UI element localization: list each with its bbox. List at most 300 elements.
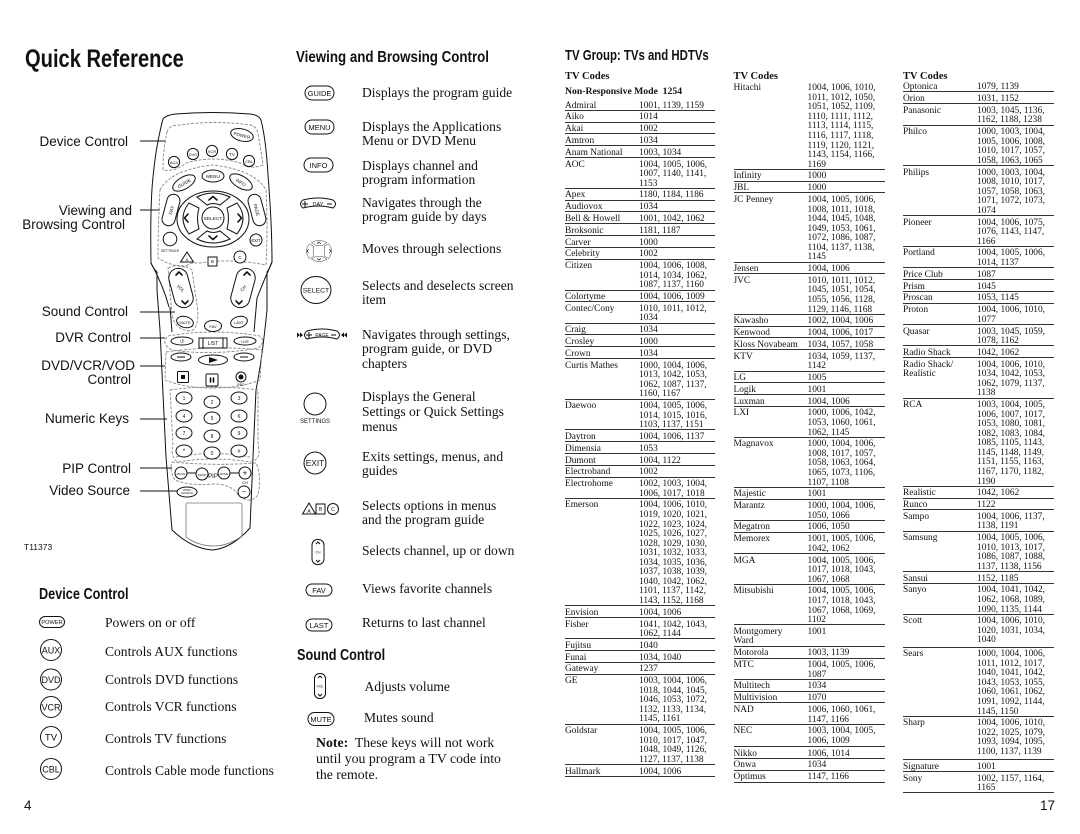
- numeric keys: *: [183, 449, 186, 455]
- page number 17: 17: [1040, 798, 1055, 813]
- volume, channel and DVR keys: LIVE: [241, 340, 249, 344]
- label: DVR Control: DVR Control: [55, 330, 131, 345]
- icon: MENU key: MENU: [308, 123, 331, 132]
- numeric keys: 3: [238, 396, 241, 402]
- icon: DVD key: DVD: [41, 675, 61, 685]
- table: TV codes column 1: Celebrity: [565, 249, 600, 259]
- table: TV codes column 1: Akai: [565, 124, 583, 134]
- table: TV codes column 3: Sanyo: [903, 585, 926, 595]
- table: TV codes column 1: 1006, 1017, 1018: [639, 489, 705, 499]
- numeric keys: [176, 392, 247, 459]
- device keys: [168, 126, 255, 168]
- table: TV codes column 1: 1014, 1015, 1016,: [639, 411, 707, 421]
- device keys: VCR: [208, 149, 216, 154]
- table: TV codes column 1: Crown: [565, 349, 591, 359]
- icon: LAST key: [306, 619, 332, 631]
- table: TV codes column 3: 1042, 1062: [977, 488, 1019, 498]
- text: device control descriptions: [105, 615, 274, 778]
- table: TV codes column 1: GE: [565, 676, 578, 686]
- text: viewing and browsing descriptions: item: [362, 292, 386, 307]
- icon: FAV key: FAV: [312, 586, 326, 595]
- note: Note: These keys will not work: [316, 735, 494, 750]
- icon: MUTE key: MUTE: [310, 715, 332, 724]
- table: TV codes column 2: 1004, 1006, 1010,: [808, 83, 875, 93]
- icon: VCR key: VCR: [41, 702, 61, 712]
- heading: Device Control: Device Control: [39, 586, 129, 603]
- table: TV codes column 1: Electrohome: [565, 479, 613, 489]
- volume, channel and DVR keys: MUTE: [179, 320, 191, 325]
- table: TV codes column 1: Apex: [565, 190, 585, 200]
- text: viewing and browsing descriptions: guides: [362, 463, 397, 478]
- table: TV codes column 3: 1138: [977, 388, 995, 398]
- table: TV codes column 1: 1010, 1017, 1047,: [639, 736, 707, 746]
- text: device control descriptions: Controls Cable mode functions: [105, 763, 274, 778]
- table: TV codes column 3: 1011, 1012, 1017,: [977, 659, 1045, 669]
- table: TV codes column 1: Emerson: [565, 500, 598, 510]
- navigation keys: INFO: [235, 178, 247, 188]
- table: TV codes column 1: 1014: [639, 112, 658, 122]
- table: TV codes column 1: Admiral: [565, 101, 596, 111]
- table: TV codes column 1: 1004, 1005, 1006,: [639, 401, 707, 411]
- table: TV codes column 1: Dumont: [565, 456, 596, 466]
- label: DVD/VCR/VOD Control: Control: [87, 372, 131, 387]
- table: TV codes column 1: 1028, 1029, 1030,: [639, 539, 707, 549]
- icon: PAGE key: PAGE: [315, 333, 329, 339]
- table: TV codes column 1: 1014, 1034, 1062,: [639, 271, 707, 281]
- text: viewing and browsing descriptions: Returns to last channel: [362, 615, 486, 630]
- table: TV codes column 2: 1000, 1006, 1042,: [808, 408, 875, 418]
- table: TV codes column 1: 1003, 1034: [639, 148, 681, 158]
- text: device control descriptions: Controls TV functions: [105, 731, 226, 746]
- table: TV codes column 2: 1102: [808, 615, 826, 625]
- text: viewing and browsing descriptions: Settings or Quick Settings: [362, 404, 504, 419]
- table: TV codes column 1: 1103, 1137, 1151: [639, 420, 704, 430]
- table: TV codes column 3: 1003, 1004, 1005,: [977, 400, 1045, 410]
- table: TV codes column 3: 1008, 1010, 1017,: [977, 177, 1045, 187]
- table: TV codes column 3: 1079, 1139: [977, 82, 1019, 92]
- navigation keys: MENU: [206, 174, 220, 179]
- volume, channel and DVR keys: CH: [239, 284, 247, 292]
- label: Viewing and Browsing Control: [22, 203, 132, 232]
- table: TV codes column 2: 1062, 1145: [808, 428, 849, 438]
- table: TV codes column 3: Philco: [903, 127, 927, 137]
- note: the remote.: [316, 767, 378, 782]
- table: TV codes column 3: 1165: [977, 783, 995, 793]
- table: TV codes column 3: 1004, 1006, 1075,: [977, 218, 1045, 228]
- table: TV codes column 3: 1022, 1025, 1079,: [977, 728, 1045, 738]
- table: TV codes column 1: 1001, 1042, 1062: [639, 214, 705, 224]
- table: TV codes column 3: 1122: [977, 500, 995, 510]
- table: TV codes column 1: 1002: [639, 467, 658, 477]
- table: TV codes column 3: 1001: [977, 762, 996, 772]
- table: TV codes column 2: Kenwood: [734, 328, 770, 338]
- label: Video Source: Video Source: [49, 483, 130, 498]
- table: TV codes column 1: Envision: [565, 608, 598, 618]
- table: TV codes column 3: 1003, 1045, 1059,: [977, 327, 1045, 337]
- table: TV codes column 2: [734, 83, 885, 783]
- table: TV codes column 2: JVC: [734, 276, 750, 286]
- table: TV codes column 1: 1180, 1184, 1186: [639, 190, 704, 200]
- volume, channel and DVR keys: [167, 266, 257, 387]
- table: TV codes column 2: 1004, 1005, 1006,: [808, 660, 875, 670]
- icon: SETTINGS key: [300, 393, 330, 425]
- table: TV codes column 1: AOC: [565, 160, 585, 170]
- table: TV codes column 2: 1067, 1068: [808, 575, 850, 585]
- text: viewing and browsing descriptions: Selects and deselects screen: [362, 278, 514, 293]
- table: TV codes column 2: Mitsubishi: [734, 586, 774, 596]
- table: TV codes column 3: 1045: [977, 282, 996, 292]
- table: TV codes column 1: 1046, 1053, 1072,: [639, 695, 707, 705]
- numeric keys: 6: [238, 414, 241, 420]
- icon: volume key: VOL: [316, 684, 324, 688]
- numeric keys: 7: [183, 431, 186, 437]
- table: TV codes column 1: 1034: [639, 202, 658, 212]
- table: TV codes column 1: Amtron: [565, 136, 594, 146]
- table: TV codes column 2: 1004, 1005, 1006,: [808, 195, 875, 205]
- table: TV codes column 2: 1000, 1004, 1006,: [808, 439, 875, 449]
- table: TV codes column 2: 1169: [808, 160, 826, 170]
- table: TV codes column 2: 1004, 1005, 1006,: [808, 556, 875, 566]
- table: TV codes column 1: 1004, 1006: [639, 608, 681, 618]
- icon: A B C keys: A: [307, 509, 311, 515]
- table: TV codes column 1: 1034: [639, 313, 658, 323]
- table: TV codes column 3: 1071, 1072, 1073,: [977, 196, 1045, 206]
- table: TV codes column 3: Orion: [903, 94, 925, 104]
- volume, channel and DVR keys: FAV: [209, 324, 217, 329]
- table: TV codes column 1: Electroband: [565, 467, 610, 477]
- table: TV codes column 2: 1042, 1062: [808, 544, 850, 554]
- table: TV codes column 1: Crosley: [565, 337, 594, 347]
- table: TV codes column 2: Ward: [734, 636, 754, 646]
- table: TV codes column 1: 1004, 1006, 1009: [639, 292, 705, 302]
- text: viewing and browsing descriptions: program guide, or DVD: [362, 341, 492, 356]
- PIP keys and video source: MOVE: [220, 472, 228, 476]
- text: viewing and browsing descriptions: and the program guide: [362, 512, 484, 527]
- table: TV codes column 2: 1119, 1120, 1121,: [808, 141, 874, 151]
- table: TV codes column 3: 1091, 1092, 1144,: [977, 697, 1045, 707]
- table: TV codes column 3: 1004, 1005, 1006,: [977, 533, 1045, 543]
- table: TV codes column 3: 1074: [977, 206, 996, 216]
- table: TV codes column 1: 1034: [639, 325, 658, 335]
- note: until you program a TV code into: [316, 751, 501, 766]
- PIP keys and video source: MOVE: [177, 472, 185, 476]
- volume, channel and DVR keys: ↺: [180, 339, 184, 345]
- table: TV codes column 2: 1034, 1057, 1058: [808, 340, 873, 350]
- numeric keys: 0: [211, 451, 214, 457]
- table: TV codes column 1: Dimensia: [565, 444, 601, 454]
- table: TV codes column 2: 1000, 1004, 1006,: [808, 501, 875, 511]
- table: TV codes column 1: 1003, 1004, 1006,: [639, 676, 707, 686]
- table: TV codes column 3: 1005, 1006, 1008,: [977, 137, 1045, 147]
- table: TV codes column 3: 1093, 1094, 1095,: [977, 737, 1045, 747]
- table: TV codes column 2: 1034: [808, 681, 826, 691]
- table: TV codes column 1: 1007, 1140, 1141,: [639, 169, 706, 179]
- numeric keys: 5: [211, 416, 214, 422]
- text: adjusts volume: Adjusts volume: [364, 679, 450, 694]
- label: DVD/VCR/VOD Control: DVD/VCR/VOD: [41, 358, 135, 373]
- table: TV codes column 1: 1087, 1137, 1160: [639, 280, 704, 290]
- table: TV codes column 3: 1078, 1162: [977, 336, 1019, 346]
- table: TV codes column 3: 1062, 1068, 1089,: [977, 595, 1045, 605]
- table: TV codes column 2: Montgomery: [734, 627, 782, 637]
- table: TV codes column 2: 1005: [808, 373, 826, 383]
- table: TV codes column 3: Optonica: [903, 82, 937, 92]
- figure code: T11373: [24, 542, 52, 552]
- text: viewing and browsing descriptions: Exits settings, menus, and: [362, 449, 503, 464]
- table: TV codes column 2: 1107, 1108: [808, 478, 849, 488]
- table: TV codes column 3: 1152, 1185: [977, 574, 1018, 584]
- table: TV codes column 2: Optimus: [734, 772, 766, 782]
- table: TV codes column 2: 1145: [808, 252, 826, 262]
- text: device control descriptions: Powers on or off: [105, 615, 195, 630]
- table: TV codes column 3: Sansui: [903, 574, 928, 584]
- non-responsive mode line: Non-Responsive Mode 1254: [565, 86, 682, 97]
- numeric keys: 4: [183, 414, 186, 420]
- table: TV codes column 1: Curtis Mathes: [565, 361, 618, 371]
- table: TV codes column 2: Kloss Novabeam: [734, 340, 798, 350]
- table: TV codes column 3: 1085, 1105, 1143,: [977, 438, 1044, 448]
- text: viewing and browsing descriptions: program information: [362, 172, 475, 187]
- table: TV codes column 1: 1002: [639, 249, 658, 259]
- label: Sound Control: Sound Control: [42, 304, 128, 319]
- table: TV codes column 3: Radio Shack: [903, 348, 951, 358]
- table: TV codes column 3: 1043, 1053, 1055,: [977, 678, 1045, 688]
- table: TV codes column 1: 1004, 1006, 1137: [639, 432, 704, 442]
- table: TV codes column 2: 1004, 1006, 1017: [808, 328, 873, 338]
- table: TV codes column 2: 1011, 1012, 1050,: [808, 93, 875, 103]
- table: TV codes column 1: Gateway: [565, 664, 598, 674]
- table: TV codes column 1: 1004, 1006: [639, 767, 681, 777]
- table: TV codes column 2: 1001: [808, 627, 826, 637]
- table: TV codes column 3: Realistic: [903, 369, 936, 379]
- table: TV codes column 2: 1003, 1004, 1005,: [808, 726, 875, 736]
- table: TV codes column 2: KTV: [734, 352, 753, 362]
- table: TV codes column 2: 1113, 1114, 1115,: [808, 121, 873, 131]
- table: TV codes column 1: 1037, 1038, 1039,: [639, 567, 707, 577]
- PIP keys and video source: SWAP: [198, 473, 206, 477]
- table: TV codes column 1: 1145, 1161: [639, 714, 680, 724]
- icon: TV key: TV: [45, 732, 58, 744]
- table: TV codes column 2: 1000: [808, 183, 826, 193]
- volume, channel and DVR keys: LIST: [208, 341, 218, 347]
- table: TV codes column 1: 1040: [639, 641, 658, 651]
- table: TV codes column 2: 1010, 1011, 1012,: [808, 276, 875, 286]
- table: TV codes column 2: 1087: [808, 670, 826, 680]
- table: TV codes column 2: 1072, 1086, 1087,: [808, 233, 875, 243]
- text: viewing and browsing descriptions: Views favorite channels: [362, 581, 492, 596]
- table: TV codes column 2: Onwa: [734, 760, 756, 770]
- table: TV codes column 1: Aiko: [565, 112, 584, 122]
- table: TV codes column 1: Daytron: [565, 432, 596, 442]
- navigation keys: SELECT: [204, 216, 222, 222]
- table: TV codes column 1: 1040, 1042, 1062,: [639, 577, 707, 587]
- table: TV codes column 3: 1004, 1041, 1042,: [977, 585, 1045, 595]
- table: TV codes column 2: 1070: [808, 693, 826, 703]
- table: TV codes column 1: Bell & Howell: [565, 214, 620, 224]
- table: TV codes column 2: NEC: [734, 726, 752, 736]
- text: viewing and browsing descriptions: program guide by days: [362, 209, 487, 224]
- table: TV codes column 3: Runco: [903, 500, 927, 510]
- table: TV codes column 3: 1167, 1170, 1182,: [977, 467, 1044, 477]
- heading: TV Codes column 1: TV Codes: [565, 71, 609, 82]
- table: TV codes column 2: 1000: [808, 171, 826, 181]
- table: TV codes column 3: 1000, 1003, 1004,: [977, 127, 1045, 137]
- table: TV codes column 3: 1010, 1017, 1057,: [977, 146, 1045, 156]
- icon: channel key: CH: [315, 550, 321, 554]
- table: TV codes column 1: 1004, 1005, 1006,: [639, 160, 707, 170]
- icon: FAV key: [306, 584, 332, 596]
- text: device control descriptions: Controls DVD functions: [105, 672, 238, 687]
- table: TV codes column 1: Funai: [565, 653, 586, 663]
- table: TV codes column 2: 1008, 1011, 1018,: [808, 205, 875, 215]
- table: TV codes column 1: 1062, 1087, 1137,: [639, 380, 707, 390]
- text: mutes sound: Mutes sound: [364, 710, 434, 725]
- table: TV codes column 2: 1051, 1052, 1109,: [808, 102, 875, 112]
- icon: GUIDE key: GUIDE: [308, 89, 331, 98]
- PIP keys and video source: PIP: [208, 474, 218, 480]
- table: TV codes column 2: 1001: [808, 385, 826, 395]
- table: TV codes column 1: Craig: [565, 325, 586, 335]
- table: TV codes column 1: 1034: [639, 349, 658, 359]
- table: TV codes column 3: 1040: [977, 635, 996, 645]
- navigation keys: SETTINGS: [161, 249, 180, 253]
- table: TV codes column 1: 1127, 1137, 1138: [639, 755, 704, 765]
- table: TV codes column 1: 1101, 1137, 1142,: [639, 586, 706, 596]
- text: viewing and browsing descriptions: Selects options in menus: [362, 498, 496, 513]
- table: TV codes column 3: 1145, 1148, 1149,: [977, 448, 1044, 458]
- table: TV codes column 3: 1020, 1031, 1034,: [977, 626, 1045, 636]
- table: TV codes column 3: 1138, 1191: [977, 521, 1018, 531]
- table: TV codes column 1: 1002, 1003, 1004,: [639, 479, 707, 489]
- icon: INFO key: [304, 158, 333, 172]
- table: TV codes column 3: 1000, 1003, 1004,: [977, 168, 1045, 178]
- navigation keys: PAGE: [252, 203, 261, 217]
- table: TV codes column 3: 1190: [977, 477, 995, 487]
- table: TV codes column 2: Multivision: [734, 693, 777, 703]
- heading: Viewing and Browsing Control: Viewing and Browsing Control: [296, 49, 489, 66]
- volume, channel and DVR keys: LAST: [234, 320, 245, 325]
- icon: TV key: [40, 726, 62, 748]
- text: viewing and browsing descriptions: Displays the Applications: [362, 119, 501, 134]
- table: TV codes column 2: Luxman: [734, 397, 765, 407]
- table: TV codes column 1: Citizen: [565, 261, 592, 271]
- page number 4: 4: [24, 798, 32, 813]
- icon: AUX key: AUX: [42, 646, 60, 656]
- icon: MENU key: [305, 120, 334, 134]
- label: Viewing and Browsing Control: Browsing Control: [22, 217, 125, 232]
- table: TV codes column 3: RCA: [903, 400, 922, 410]
- table: TV codes column 3: Signature: [903, 762, 939, 772]
- table: TV codes column 3: 1137, 1138, 1156: [977, 562, 1042, 572]
- PIP keys and video source: +: [243, 468, 248, 478]
- volume, channel and DVR keys: REC: [237, 383, 245, 387]
- table: TV codes column 2: 1143, 1154, 1166,: [808, 150, 874, 160]
- table: TV codes column 3: 1087: [977, 270, 996, 280]
- icon: SETTINGS key: SETTINGS: [300, 419, 330, 425]
- table: TV codes column 2: Multitech: [734, 681, 770, 691]
- navigation keys: B: [211, 259, 214, 264]
- icon: A B C keys: C: [331, 507, 335, 513]
- table: TV codes column 3: Price Club: [903, 270, 943, 280]
- heading: TV Codes column 2: TV Codes: [734, 71, 778, 82]
- table: TV codes column 3: 1000, 1004, 1006,: [977, 649, 1045, 659]
- table: TV codes column 3: 1002, 1157, 1164,: [977, 774, 1044, 784]
- numeric keys: 1: [183, 396, 186, 402]
- table: TV codes column 3: Sampo: [903, 512, 929, 522]
- table: TV codes column 3: [903, 82, 1054, 793]
- table: TV codes column 1: Daewoo: [565, 401, 596, 411]
- table: TV codes column 2: 1067, 1068, 1069,: [808, 606, 875, 616]
- table: TV codes column 2: 1001: [808, 489, 826, 499]
- table: TV codes column 1: 1004, 1005, 1006,: [639, 726, 707, 736]
- table: TV codes column 3: 1004, 1006, 1010,: [977, 718, 1045, 728]
- icon: SELECT key: SELECT: [303, 288, 329, 294]
- table: TV codes column 1: Goldstar: [565, 726, 597, 736]
- numeric keys: 2: [211, 400, 214, 406]
- table: TV codes column 2: 1045, 1051, 1054,: [808, 285, 875, 295]
- table: TV codes column 1: 1000: [639, 238, 658, 248]
- table: TV codes column 1: 1053: [639, 444, 658, 454]
- table: TV codes column 1: 1000: [639, 337, 658, 347]
- table: TV codes column 1: 1004, 1006, 1008,: [639, 261, 707, 271]
- table: TV codes column 1: 1181, 1187: [639, 226, 680, 236]
- icon: EXIT key: EXIT: [306, 458, 324, 468]
- table: TV codes column 1: 1013, 1042, 1053,: [639, 370, 707, 380]
- table: TV codes column 1: 1004, 1122: [639, 456, 681, 466]
- table: TV codes column 2: 1044, 1045, 1048,: [808, 214, 875, 224]
- device keys: POWER: [233, 131, 251, 140]
- table: TV codes column 3: 1082, 1083, 1084,: [977, 429, 1045, 439]
- table: TV codes column 2: JBL: [734, 183, 749, 193]
- table: TV codes column 3: 1004, 1006, 1010,: [977, 360, 1045, 370]
- table: TV codes column 3: 1040, 1041, 1042,: [977, 668, 1045, 678]
- table: TV codes column 2: Jensen: [734, 264, 758, 274]
- navigation keys: DAY: [168, 205, 175, 215]
- table: TV codes column 1: [565, 101, 715, 777]
- table: TV codes column 3: Philips: [903, 168, 929, 178]
- table: TV codes column 1: Anam National: [565, 148, 623, 158]
- table: TV codes column 1: 1153: [639, 179, 657, 189]
- table: TV codes column 2: 1065, 1073, 1106,: [808, 468, 875, 478]
- table: TV codes column 2: Memorex: [734, 534, 770, 544]
- table: TV codes column 3: 1076, 1143, 1147,: [977, 227, 1044, 237]
- table: TV codes column 3: 1086, 1087, 1088,: [977, 552, 1045, 562]
- icon: SELECT key: [301, 276, 331, 304]
- table: TV codes column 2: 1034, 1059, 1137,: [808, 352, 875, 362]
- table: TV codes column 3: 1053, 1145: [977, 293, 1019, 303]
- numeric keys: 8: [211, 434, 214, 440]
- table: TV codes column 1: 1010, 1011, 1012,: [639, 304, 707, 314]
- icon: POWER key: [40, 616, 64, 628]
- table: TV codes column 2: Logik: [734, 385, 756, 395]
- icon: A B C keys: [302, 503, 338, 515]
- numeric keys: 9: [238, 431, 241, 437]
- title: Quick Reference: [25, 44, 184, 72]
- table: TV codes column 2: NAD: [734, 705, 754, 715]
- table: TV codes column 3: 1014, 1137: [977, 258, 1019, 268]
- icon: CBL key: [40, 758, 62, 780]
- text: viewing and browsing descriptions: Displays the program guide: [362, 85, 512, 100]
- table: TV codes column 2: Marantz: [734, 501, 765, 511]
- icon: AUX key: [40, 640, 62, 660]
- table: TV codes column 1: 1025, 1026, 1027,: [639, 529, 707, 539]
- table: TV codes column 2: Nikko: [734, 749, 757, 759]
- table: TV codes column 2: 1116, 1117, 1118,: [808, 131, 873, 141]
- table: TV codes column 1: Broksonic: [565, 226, 604, 236]
- table: TV codes column 1: Hallmark: [565, 767, 600, 777]
- table: TV codes column 1: 1034, 1035, 1036,: [639, 558, 707, 568]
- device keys: AUX: [170, 160, 178, 165]
